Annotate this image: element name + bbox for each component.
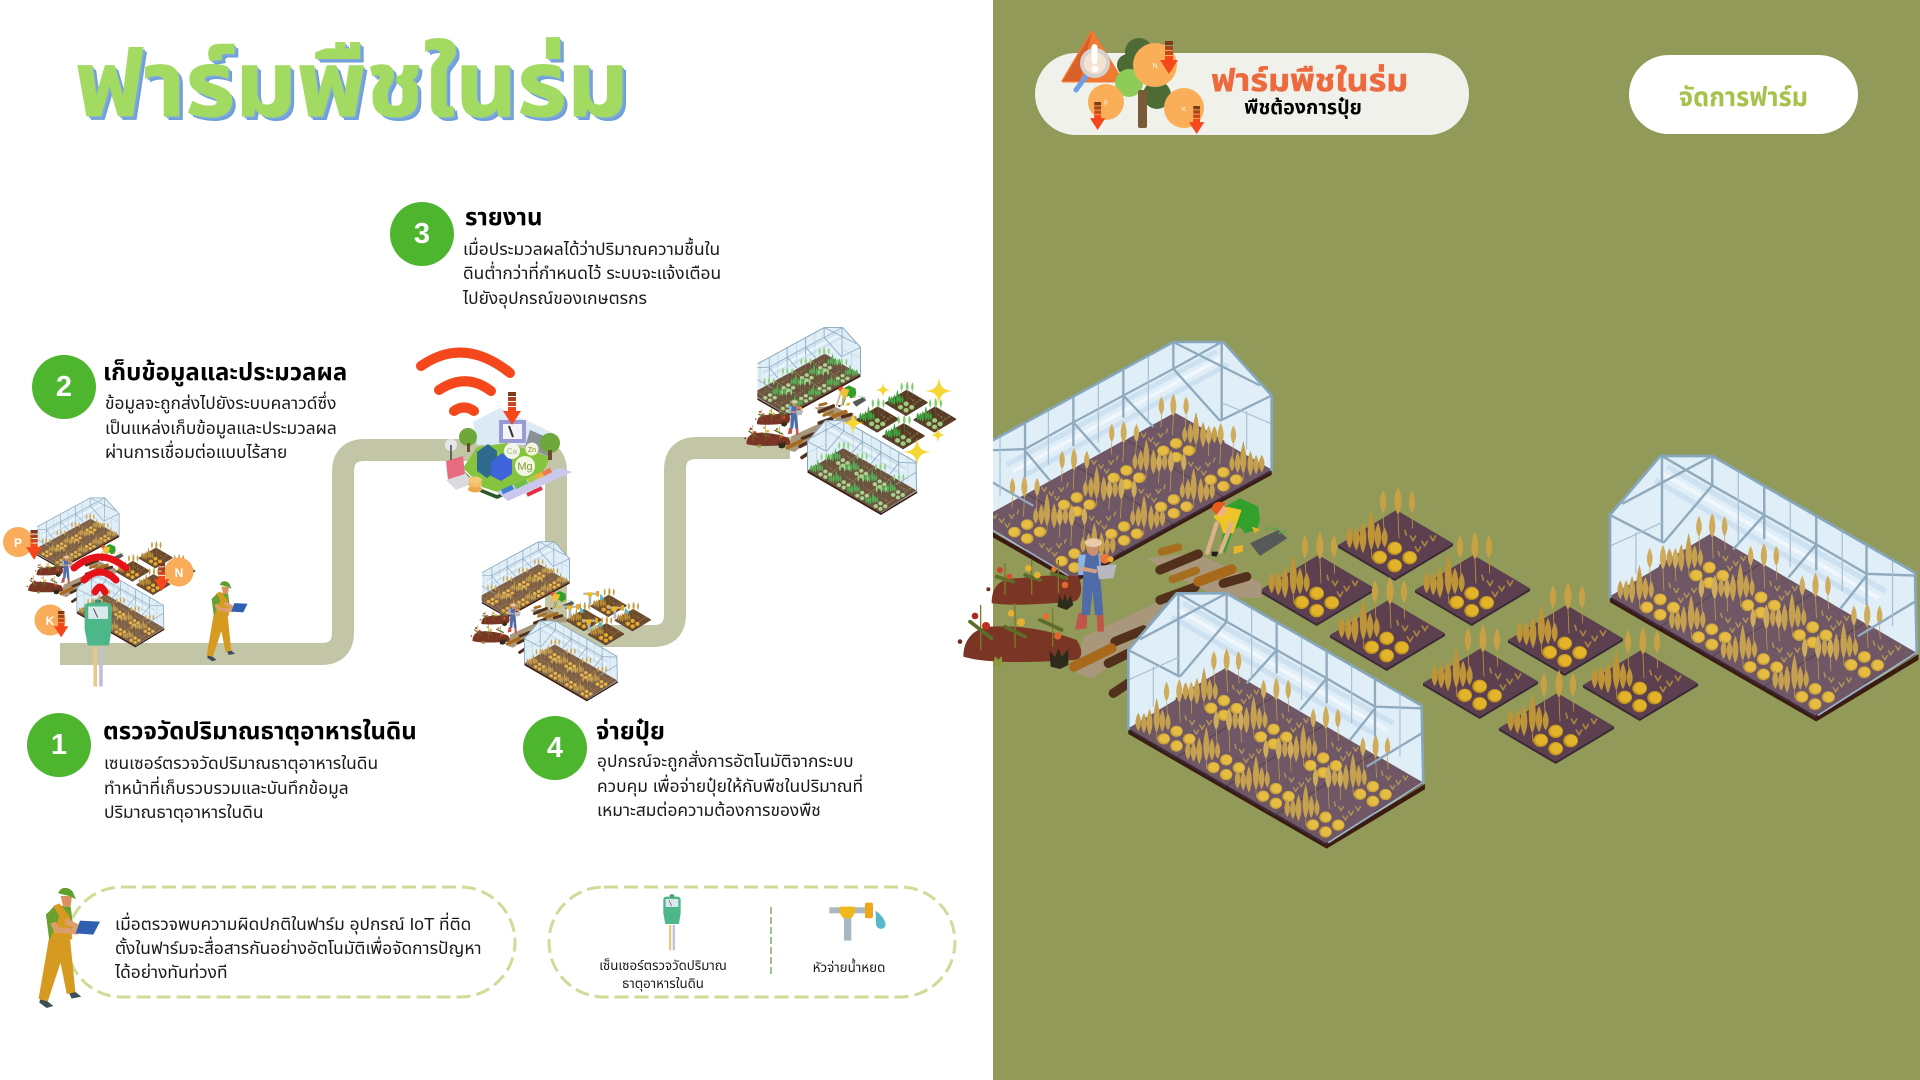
illustration: step 1 farm with sensor: P (14, 536, 22, 550)
callout text: เมื่อตรวจพบความผิดปกติในฟาร์ม อุปกรณ์ IoT ที่ติด (115, 914, 471, 934)
illustration: step 1 farm with sensor: N (175, 566, 183, 580)
manage farm button label: จัดการฟาร์ม (1679, 82, 1808, 112)
illustration: step 2 cloud data: Ca (507, 447, 518, 456)
callout text (114, 912, 482, 982)
panel: right farm background (993, 0, 1920, 1080)
legend label: sensor: เซ็นเซอร์ตรวจวัดปริมาณ (599, 958, 727, 973)
illustration: step 3 healthy farm (744, 328, 956, 515)
illustration: step 2 cloud data: Mg (517, 461, 533, 473)
farmer with tablet on path (207, 581, 248, 661)
text: ไปยังอุปกรณ์ของเกษตรกร (463, 288, 647, 308)
text: เมื่อประมวลผลได้ว่าปริมาณความชื้นใน (463, 238, 720, 258)
text: รายงาน (465, 204, 542, 231)
text: เหมาะสมต่อความต้องการของพืช (597, 800, 821, 820)
status pill background (1035, 53, 1469, 135)
illustration: step 1 farm with sensor: K (46, 614, 55, 628)
illustration: step 2 cloud data: Zn (528, 447, 536, 454)
step 4: fertilize (523, 716, 863, 820)
text: ควบคุม เพื่อจ่ายปุ๋ยให้กับพืชในปริมาณที่ (597, 776, 863, 796)
legend box: dashed outline (549, 887, 955, 997)
callout box: dashed outline (67, 887, 515, 997)
icon: nutrient deficiency tree with warning: N (1152, 63, 1158, 70)
text: เป็นแหล่งเก็บข้อมูลและประมวลผล (105, 418, 337, 438)
farmer with tablet beside callout (39, 888, 100, 1008)
callout text: ได้อย่างทันท่วงที (115, 962, 228, 982)
text: ผ่านการเชื่อมต่อแบบไร้สาย (105, 442, 287, 462)
title: ฟาร์มพืชในร่ม (75, 34, 629, 136)
legend label: drip: หัวจ่ายน้ำหยด (813, 960, 885, 975)
text: 2 (56, 371, 72, 403)
text: ปริมาณธาตุอาหารในดิน (104, 802, 263, 822)
main farm illustration (958, 342, 1919, 849)
text: 4 (547, 732, 563, 764)
manage farm pill background (1629, 55, 1858, 134)
text: จ่ายปุ๋ย (596, 718, 665, 745)
icon: drip emitter (829, 903, 886, 941)
icon: nutrient deficiency tree with warning: P (1104, 101, 1108, 107)
text: 1 (51, 729, 67, 761)
text: อุปกรณ์จะถูกสั่งการอัตโนมัติจากระบบ (597, 751, 854, 771)
text: ตรวจวัดปริมาณธาตุอาหารในดิน (103, 718, 417, 745)
status pill subtitle: พืชต้องการปุ๋ย (1244, 97, 1362, 119)
illustration: step 1 farm with sensor (3, 498, 195, 687)
text: เซนเซอร์ตรวจวัดปริมาณธาตุอาหารในดิน (104, 753, 378, 773)
text: ทำหน้าที่เก็บรวบรวมและบันทึกข้อมูล (104, 778, 349, 798)
callout text: ตั้งในฟาร์มจะสื่อสารกันอย่างอัตโนมัติเพื่อจัดการปัญหา (115, 938, 482, 958)
legend label: sensor (599, 958, 727, 992)
legend label: sensor: ธาตุอาหารในดิน (622, 976, 704, 991)
text: เก็บข้อมูลและประมวลผล (103, 359, 347, 386)
icon: nutrient deficiency tree with warning: K (1182, 107, 1186, 113)
icon: soil sensor (663, 894, 681, 950)
step 1: measure soil nutrients (27, 713, 417, 822)
step 3: report (390, 202, 721, 308)
text: 3 (414, 218, 430, 250)
illustration: step 4 farm with drippers (471, 542, 651, 701)
legend divider (770, 907, 772, 976)
illustration: step 2 cloud data (421, 353, 572, 501)
text: ดินต่ำกว่าที่กำหนดไว้ ระบบจะแจ้งเตือน (463, 263, 721, 283)
status pill title: ฟาร์มพืชในร่ม (1211, 63, 1408, 98)
icon: nutrient deficiency tree with warning (1063, 32, 1204, 134)
step 2: collect and process (32, 355, 347, 462)
text: ข้อมูลจะถูกส่งไปยังระบบคลาวด์ซึ่ง (105, 393, 336, 413)
process path (60, 448, 790, 654)
